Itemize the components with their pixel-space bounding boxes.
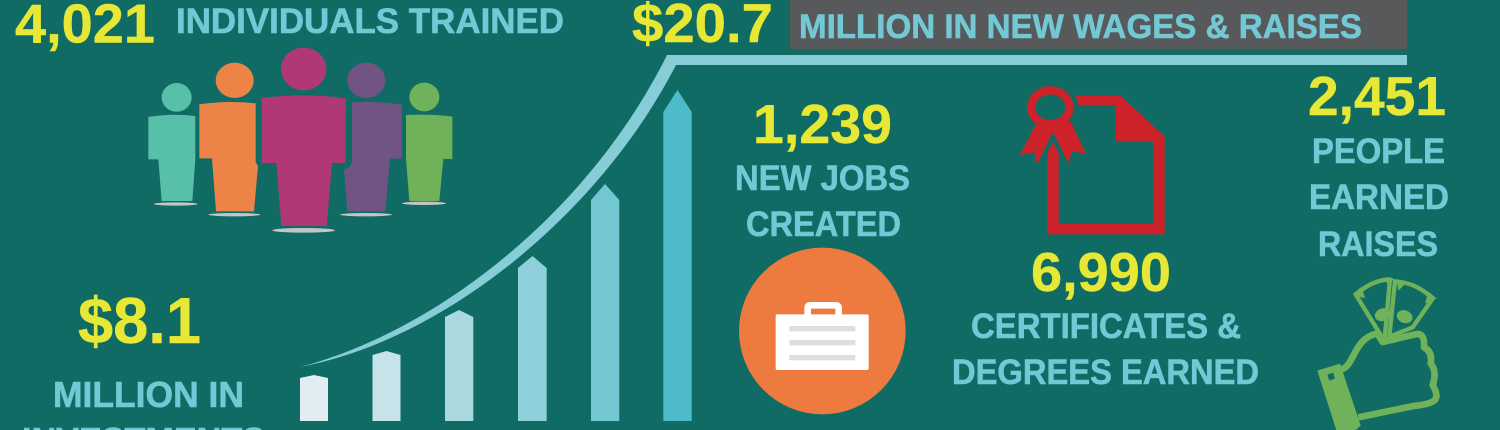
icon: group of people	[148, 48, 452, 233]
stat: certificates and degrees: CERTIFICATES &	[971, 307, 1241, 346]
stat: people earned raises: EARNED	[1309, 178, 1449, 217]
stat: people earned raises: PEOPLE	[1312, 132, 1445, 171]
icon: certificate document with ribbon	[1020, 90, 1165, 234]
stat: new jobs created	[735, 93, 910, 244]
stat: investments: $8.1	[78, 284, 201, 357]
stat: people earned raises: 2,451	[1308, 65, 1446, 127]
stat: individuals trained	[15, 0, 564, 54]
stat: wages and raises	[632, 0, 1407, 54]
icon: hand holding money	[1317, 277, 1437, 430]
stat: certificates and degrees: 6,990	[1031, 241, 1171, 303]
stat: certificates and degrees	[952, 241, 1259, 392]
stat: people earned raises	[1308, 65, 1449, 264]
stat: investments	[22, 284, 265, 430]
banner: gray label	[790, 0, 1407, 49]
stat: new jobs created: 1,239	[753, 93, 892, 155]
stat: individuals trained: INDIVIDUALS TRAINED	[176, 2, 564, 41]
stat: investments: MILLION IN	[53, 374, 244, 415]
icon: briefcase in orange circle	[739, 248, 906, 414]
bar chart: rising arrows	[300, 90, 692, 421]
stat: people earned raises: RAISES	[1318, 225, 1438, 264]
stat: new jobs created: CREATED	[746, 205, 901, 244]
growth curve line	[300, 55, 1407, 367]
stat: wages and raises: MILLION IN NEW WAGES & RAISES	[799, 8, 1362, 46]
stat: certificates and degrees: DEGREES EARNED	[952, 353, 1259, 392]
stat: new jobs created: NEW JOBS	[735, 159, 910, 198]
